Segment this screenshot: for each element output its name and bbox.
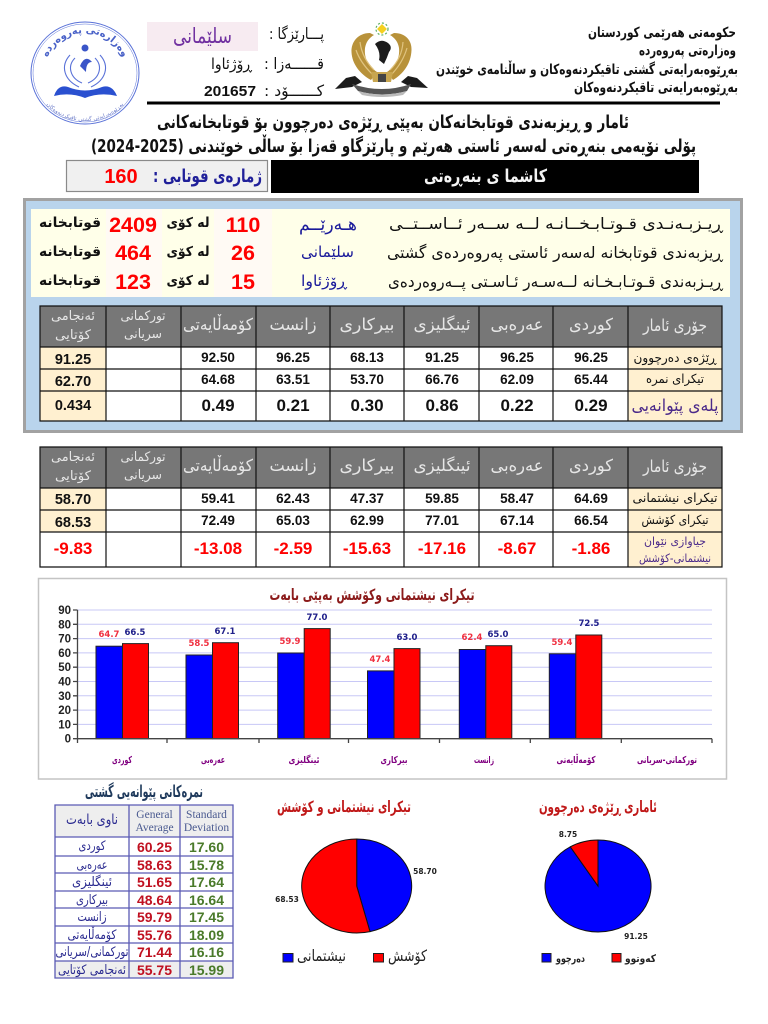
table: pass rate, average, standard score: 96.25: [276, 350, 310, 365]
table: national and effort averages: ئەنجامی: [51, 450, 95, 465]
table: pass rate, average, standard score: 0.22: [500, 396, 534, 415]
table: national and effort averages: 47.37: [350, 491, 384, 506]
table: general average and standard deviation: 55.76: [137, 927, 172, 943]
table: general average and standard deviation: General: [136, 809, 173, 821]
table: pass rate, average, standard score: تورکمانی: [120, 309, 166, 324]
table: pass rate, average, standard score: کۆتایی: [55, 328, 92, 343]
table: pass rate, average, standard score: ڕێژەی دەرچوون: [634, 350, 717, 366]
ranking summary: لە کۆی: [166, 215, 210, 231]
pie chart: pass rate: ئاماری ڕێژەی دەرچوون: [539, 798, 657, 817]
y axis labels: 0: [65, 734, 71, 746]
table: national and effort averages: 59.41: [201, 491, 235, 506]
table: pass rate, average, standard score: 91.25: [425, 350, 459, 365]
student count box: 160: [104, 166, 138, 188]
pie chart: national average and effort: تیکرای نیشتمانی و کۆشش: [277, 798, 411, 816]
x axis labels: [112, 754, 697, 766]
table: general average and standard deviation: 71.44: [137, 944, 172, 960]
x axis labels: ئینگلیزی: [288, 754, 320, 766]
table: general average and standard deviation: کۆمەڵایەتی: [68, 926, 117, 943]
table: pass rate, average, standard score: 0.434: [55, 398, 91, 414]
data labels: 62.4: [462, 633, 483, 643]
x axis labels: کۆمەڵایەتی: [556, 754, 596, 766]
table: general average and standard deviation: 17.45: [189, 909, 224, 925]
governorate value box: [147, 22, 258, 51]
chart title: تیکرای نیشتمانی وکۆشش بەپێی بابەت: [270, 586, 474, 605]
data labels: [99, 613, 600, 665]
table: general average and standard deviation: 60.25: [137, 839, 172, 855]
table: pass rate, average, standard score: 65.44: [574, 372, 608, 387]
ranking summary: لە کۆی: [166, 244, 210, 260]
ranking summary: 110: [226, 213, 260, 237]
table: pass rate, average, standard score: 91.25: [55, 352, 91, 368]
y axis labels: 80: [58, 619, 71, 631]
y axis labels: 70: [58, 634, 71, 646]
bar chart: national and effort average by subject: [38, 578, 726, 779]
district value: ڕۆژئاوا: [211, 55, 253, 73]
heading: government and ministry names: [436, 25, 738, 96]
table: national and effort averages: کۆتایی: [55, 469, 92, 484]
table: general average and standard deviation: بیرکاری: [76, 893, 108, 908]
table: general average and standard deviation: 15.99: [189, 962, 224, 978]
table: pass rate, average, standard score: 62.09: [500, 372, 534, 387]
data labels: 72.5: [579, 619, 600, 629]
table: national and effort averages: 58.47: [500, 491, 534, 506]
table: general average and standard deviation: کوردی: [78, 839, 106, 854]
table: national and effort averages: 62.99: [350, 513, 384, 528]
pie chart: pass rate: 91.25: [624, 932, 648, 941]
y axis labels: 20: [58, 705, 71, 717]
table: pass rate, average, standard score: جۆری ئامار: [642, 316, 707, 336]
table: pass rate, average, standard score: تیکرای نمرە: [646, 371, 704, 387]
table: national and effort averages: تورکمانی: [120, 450, 166, 465]
table: general average and standard deviation: 59.79: [137, 909, 172, 925]
data labels: 47.4: [370, 655, 391, 665]
table: pass rate, average, standard score: 96.25: [574, 350, 608, 365]
ranking summary: ڕیزبەندی قوتابخانە لەسەر ئاستی پەروەردەی گشتی: [387, 243, 724, 263]
table: national and effort averages: کۆمەڵایەتی: [183, 455, 253, 476]
table: national and effort averages: -13.08: [194, 539, 242, 558]
table: national and effort averages: -2.59: [274, 539, 312, 558]
table: national and effort averages: سریانی: [124, 468, 162, 483]
table: general average and standard deviation: Average: [135, 822, 174, 834]
ranking summary: لە کۆی: [166, 273, 210, 289]
icon: ministry stamp: [30, 22, 140, 124]
table: general average and standard deviation: تورکمانی/سریانی: [56, 945, 129, 960]
y axis labels: 40: [58, 676, 71, 688]
data labels: 59.9: [280, 637, 301, 647]
table: general average and standard deviation: [55, 781, 233, 978]
ranking summary: ڕۆژئاوا: [301, 272, 348, 290]
table: general average and standard deviation: ناوی بابەت: [66, 812, 118, 828]
table: pass rate, average, standard score: 0.21: [276, 396, 310, 415]
table: pass rate, average, standard score: ئەنجامی: [51, 309, 95, 324]
table: national and effort averages: 68.53: [55, 515, 91, 531]
table: general average and standard deviation: 17.60: [189, 839, 224, 855]
subject banner: [271, 160, 699, 193]
table: national and effort averages: 59.85: [425, 491, 459, 506]
pie chart: pass rate: [539, 798, 657, 965]
table: national and effort averages: کوردی: [569, 456, 613, 476]
table: national and effort averages: -9.83: [54, 539, 92, 558]
y axis labels: 10: [58, 719, 71, 731]
table: national and effort averages: -15.63: [343, 539, 391, 558]
data labels: 58.5: [189, 639, 210, 649]
table: pass rate, average, standard score: زانست: [270, 315, 316, 335]
table: pass rate, average, standard score: عەرەبی: [490, 315, 544, 335]
table: national and effort averages: [40, 447, 722, 567]
student count box: ژمارەی قوتابی :: [153, 166, 262, 187]
ranking summary: قوتابخانە: [39, 244, 101, 260]
icon: ministry stamp: وەزارەتی پەروەردە: [44, 30, 125, 57]
table: national and effort averages: تیکرای کۆشش: [642, 512, 709, 528]
ranking summary: [31, 209, 730, 297]
data labels: 77.0: [307, 613, 328, 623]
table: general average and standard deviation: 48.64: [137, 892, 172, 908]
table title: نمرەکانی پێوانەیی گشتی: [85, 781, 203, 802]
pie chart: national average and effort: [275, 798, 437, 965]
ranking summary: قوتابخانە: [39, 273, 101, 289]
y axis labels: 90: [58, 605, 71, 617]
table: pass rate, average, standard score: 96.25: [500, 350, 534, 365]
data labels: 64.7: [99, 630, 120, 640]
governorate value box: سلێمانی: [173, 24, 232, 48]
code value: 201657: [204, 84, 256, 100]
table: general average and standard deviation: ئینگلیزی: [72, 874, 112, 890]
bars: [96, 629, 602, 739]
table: pass rate, average, standard score: بیرکاری: [340, 315, 394, 335]
table: general average and standard deviation: 18.09: [189, 927, 224, 943]
table: national and effort averages: 67.14: [500, 513, 534, 528]
data labels: 63.0: [397, 633, 418, 643]
table: pass rate, average, standard score: کوردی: [569, 315, 613, 335]
table: pass rate, average, standard score: 68.13: [350, 350, 384, 365]
table: pass rate, average, standard score: ئینگلیزی: [414, 315, 470, 335]
data labels: 66.5: [125, 628, 146, 638]
table: national and effort averages: ئینگلیزی: [414, 456, 470, 476]
x axis labels: زانست: [474, 755, 494, 766]
ranking summary: قوتابخانە: [39, 215, 101, 231]
pie chart: national average and effort: نیشتمانی: [297, 947, 346, 965]
table: general average and standard deviation: 55.75: [137, 962, 172, 978]
x axis labels: عەرەبی: [201, 755, 225, 766]
table: pass rate, average, standard score: 64.68: [201, 372, 235, 387]
table: national and effort averages: عەرەبی: [490, 456, 544, 476]
table: pass rate, average, standard score: [40, 306, 722, 421]
table: pass rate, average, standard score: 0.29: [574, 396, 608, 415]
table: pass rate, average, standard score: 62.70: [55, 374, 91, 390]
table: pass rate, average, standard score: 92.50: [201, 350, 235, 365]
x axis labels: کوردی: [112, 755, 132, 766]
panel: location header: [147, 22, 325, 100]
table: general average and standard deviation: Standard: [186, 809, 227, 821]
table: national and effort averages: تیکرای نیشتمانی: [632, 490, 718, 506]
y axis labels: [58, 605, 71, 746]
ranking summary: 123: [115, 270, 151, 294]
pie chart: national average and effort: 68.53: [275, 895, 299, 904]
table: general average and standard deviation: 58.63: [137, 857, 172, 873]
governorate label: پـــارێزگا :: [269, 25, 324, 44]
pie chart: national average and effort: کۆشش: [388, 947, 427, 965]
table: national and effort averages: 65.03: [276, 513, 310, 528]
table: pass rate, average, standard score: 0.30: [350, 396, 384, 415]
table: national and effort averages: جیاوازی نێوان: [644, 534, 706, 549]
ranking summary: 26: [231, 241, 255, 265]
table: pass rate, average, standard score: 0.49: [201, 396, 235, 415]
y axis labels: 30: [58, 691, 71, 703]
table: national and effort averages: نیشتمانی-کۆشش: [639, 551, 711, 566]
pie chart: national average and effort: 58.70: [413, 867, 437, 876]
y axis labels: 50: [58, 662, 71, 674]
table: pass rate, average, standard score: 63.51: [276, 372, 310, 387]
data labels: 65.0: [488, 630, 509, 640]
table: general average and standard deviation: 16.16: [189, 944, 224, 960]
ranking summary: 464: [115, 241, 151, 265]
ranking summary: 15: [231, 270, 255, 294]
table: pass rate, average, standard score: پلەی پێوانەیی: [632, 396, 719, 416]
table: national and effort averages: -8.67: [498, 539, 536, 558]
table: pass rate, average, standard score: 53.70: [350, 372, 384, 387]
ranking summary: هـەرێــم: [299, 214, 357, 235]
data labels: 59.4: [552, 638, 573, 648]
district label: قــــــەزا :: [264, 55, 324, 73]
table: pass rate, average, standard score: سریانی: [124, 327, 162, 342]
pie chart: pass rate: 8.75: [559, 830, 577, 839]
table: national and effort averages: -1.86: [572, 539, 610, 558]
table: pass rate, average, standard score: کۆمەڵایەتی: [183, 314, 253, 335]
axes: [73, 610, 712, 743]
table: general average and standard deviation: Deviation: [184, 822, 229, 834]
icon: Kurdistan Region emblem: [335, 23, 428, 97]
icon: ministry stamp: بەڕێوەبەرایەتی گشتی تاقیکردنەوەکان: [46, 104, 124, 122]
table: general average and standard deviation: 51.65: [137, 874, 172, 890]
table: national and effort averages: جۆری ئامار: [642, 457, 707, 477]
table: national and effort averages: بیرکاری: [340, 456, 394, 476]
panel: school ranking and pass rate: [24, 200, 742, 432]
table: general average and standard deviation: 15.78: [189, 857, 224, 873]
ranking summary: ڕیـزبـەنـدی قـوتـابـخــانـە لــە ســەر ئــاســتــی: [389, 214, 724, 234]
subject banner: کاشما ی بنەڕەتی: [424, 166, 547, 187]
data labels: 67.1: [215, 627, 236, 637]
table: national and effort averages: 66.54: [574, 513, 608, 528]
pie chart: pass rate: کەوتوو: [624, 953, 657, 965]
ranking summary: 2409: [109, 213, 157, 237]
code label: کــــــۆد :: [264, 82, 325, 100]
table: national and effort averages: -17.16: [418, 539, 466, 558]
ranking summary: سلێمانی: [301, 243, 354, 261]
title: ئامار و ڕیزبەندی قوتابخانەکان بەپێی ڕێژەی دەرچوون بۆ قوتابخانەکانی: [157, 112, 629, 133]
table: general average and standard deviation: عەرەبی: [76, 858, 108, 873]
title: [91, 112, 696, 157]
table: pass rate, average, standard score: 0.86: [425, 396, 459, 415]
table: general average and standard deviation: زانست: [78, 910, 106, 925]
pie chart: pass rate: دەرچوو: [555, 953, 585, 965]
student count box: [66, 160, 268, 192]
table: national and effort averages: 58.70: [55, 492, 91, 508]
x axis labels: بیرکاری: [380, 755, 408, 766]
heading: government and ministry names: وەزارەتی پەروەردە: [639, 43, 736, 59]
table: national and effort averages: 72.49: [201, 513, 235, 528]
table: national and effort averages: 64.69: [574, 491, 608, 506]
table: general average and standard deviation: ئەنجامی کۆتایی: [58, 963, 126, 978]
table: national and effort averages: زانست: [270, 456, 316, 476]
y axis labels: 60: [58, 648, 71, 660]
x axis labels: تورکمانی-سریانی: [637, 755, 697, 766]
ranking summary: ڕیـزبەندی قـوتـابـخـانە لــەسـەر ئـاسـتی پــەروەردەی: [388, 272, 724, 292]
table: national and effort averages: 62.43: [276, 491, 310, 506]
table: general average and standard deviation: 17.64: [189, 874, 224, 890]
table: general average and standard deviation: 16.64: [189, 892, 224, 908]
table: pass rate, average, standard score: 66.76: [425, 372, 459, 387]
table: national and effort averages: 77.01: [425, 513, 459, 528]
